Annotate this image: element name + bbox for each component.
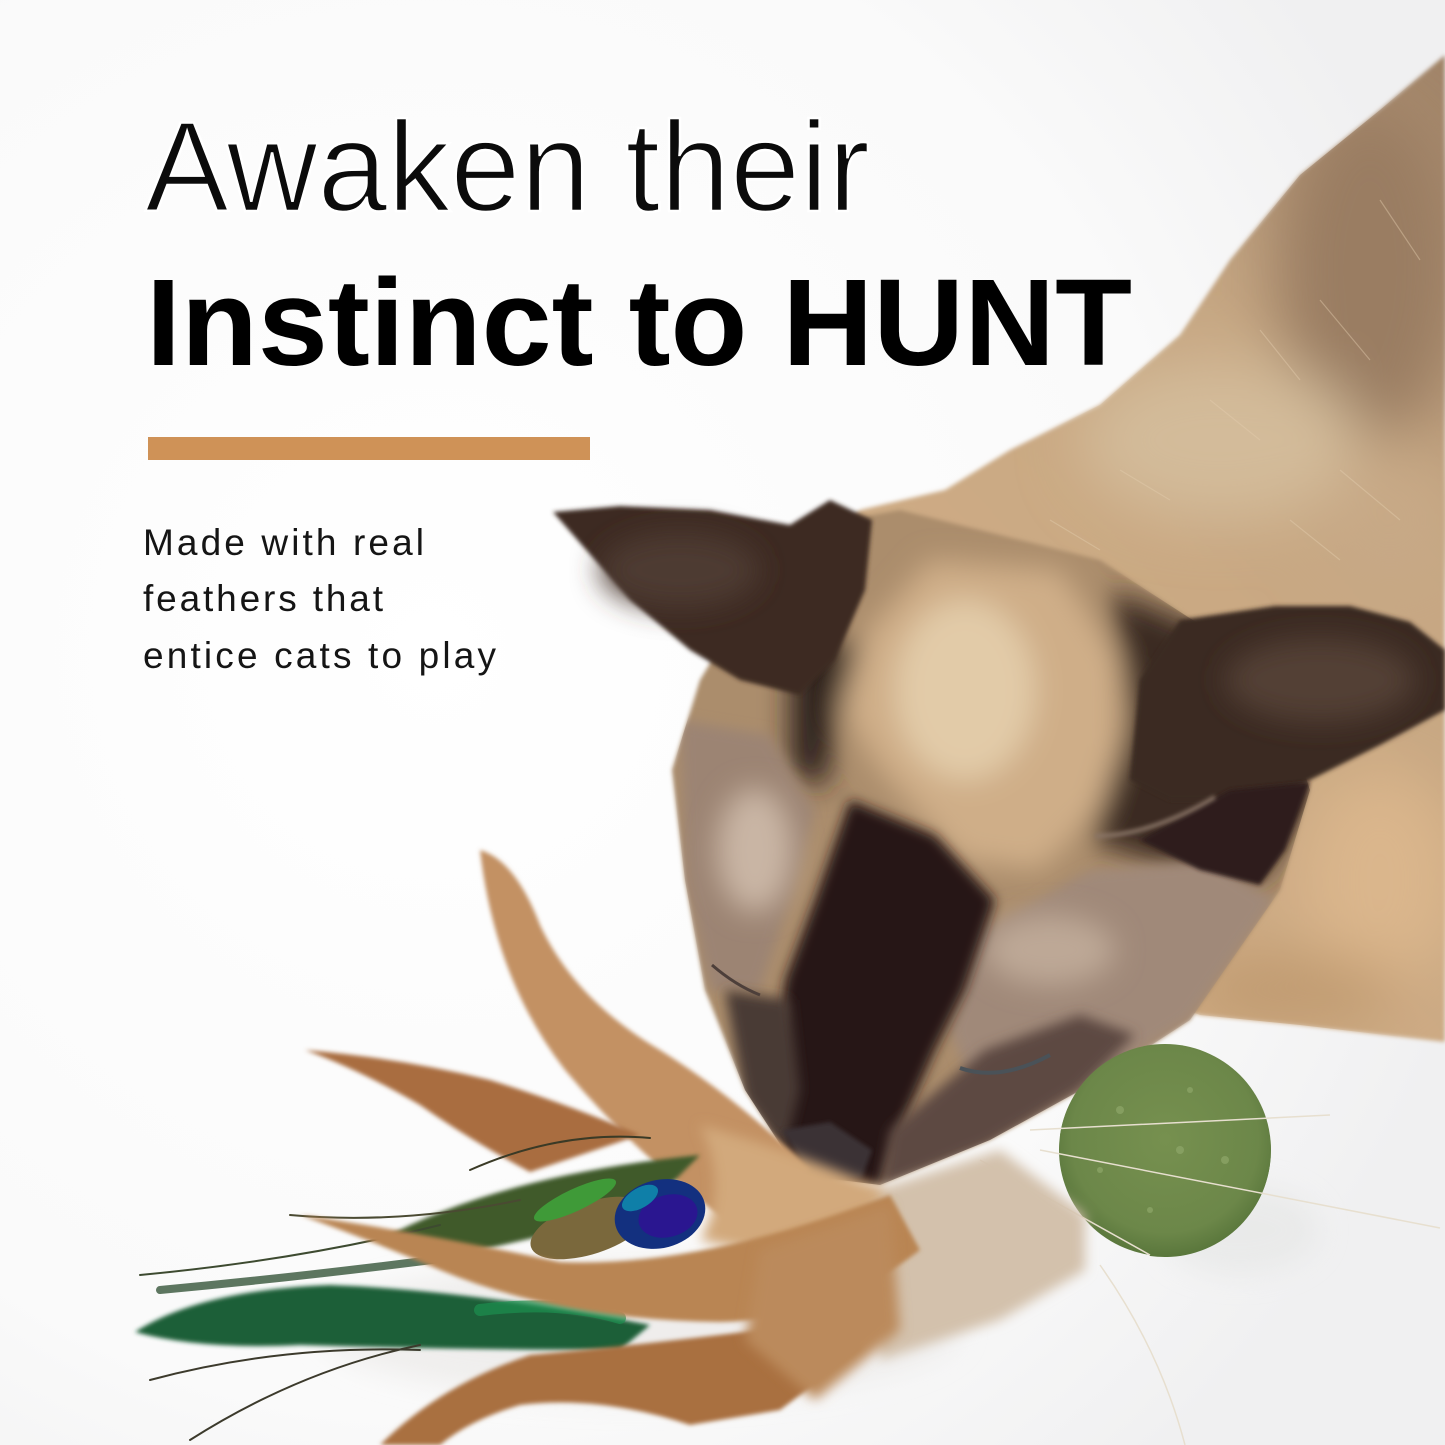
- dark muzzle mask: [770, 800, 995, 1190]
- right face darkening: [1090, 590, 1310, 880]
- light feather core: [700, 1125, 885, 1255]
- left ear: [553, 500, 872, 695]
- title line: Awaken their: Awaken their: [145, 96, 870, 239]
- left ear inner: [600, 532, 760, 608]
- right eye slit: [1095, 797, 1215, 836]
- left eye patch: [790, 640, 860, 790]
- title: [145, 96, 1132, 392]
- body shading: [1080, 100, 1445, 1025]
- peacock eye: [523, 1184, 657, 1272]
- body text: Made with real: [143, 522, 424, 563]
- body text: [143, 522, 496, 676]
- closed eye left: [712, 965, 760, 995]
- left feather: [305, 1050, 640, 1172]
- right cheek: [954, 857, 1272, 1100]
- upper feather: [480, 850, 810, 1230]
- divider bar: [148, 437, 590, 460]
- fur strokes: [1050, 200, 1420, 560]
- forehead light patch: [790, 560, 1310, 880]
- peacock plume strands: [135, 1137, 700, 1440]
- closed eye right: [960, 1055, 1050, 1073]
- bottom feather: [380, 1290, 870, 1445]
- feather mass: [745, 1205, 900, 1400]
- photo: catnip ball: [980, 1044, 1440, 1445]
- white fluff: [860, 1150, 1085, 1360]
- right ear inner: [1225, 638, 1415, 722]
- photo: cat: [553, 55, 1445, 1190]
- photo: floor shadows: [320, 1185, 1320, 1400]
- head base: [672, 510, 1310, 1185]
- body text: entice cats to play: [143, 635, 496, 676]
- body text: feathers that: [143, 578, 384, 619]
- whiskers: [980, 1115, 1440, 1445]
- cat body: [800, 55, 1445, 1042]
- left cheek: [680, 720, 815, 990]
- dark patch below right ear: [1140, 782, 1310, 885]
- main lower feather: [300, 1195, 920, 1322]
- photo: feathers and peacock plume: [135, 850, 1085, 1445]
- title line: Instinct to HUNT: Instinct to HUNT: [146, 255, 1132, 392]
- face shading: [680, 560, 1310, 1190]
- right ear: [1130, 606, 1445, 800]
- nose: [782, 1122, 872, 1182]
